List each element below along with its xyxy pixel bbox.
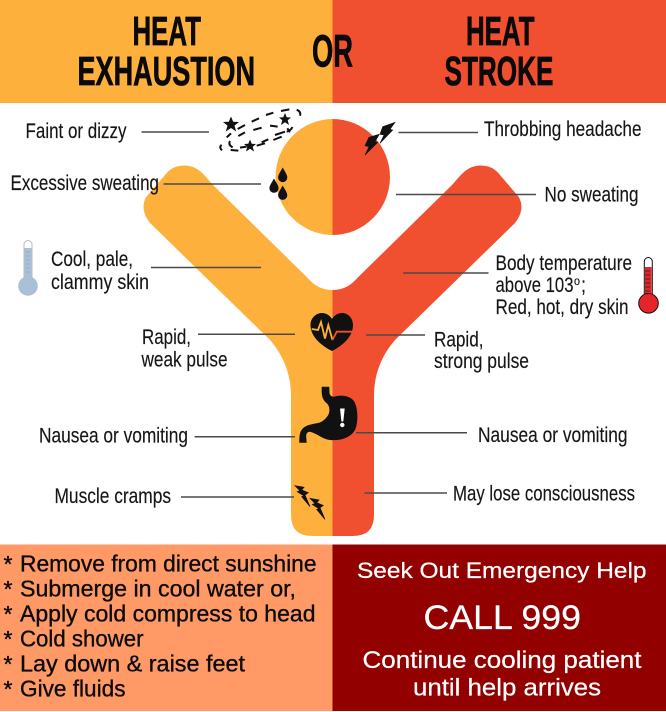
left symptoms labels bbox=[10, 120, 295, 508]
text: call 999: CALL 999 bbox=[424, 599, 581, 637]
heading: or: OR bbox=[312, 26, 353, 76]
list: first aid instructions: Apply cold compress to head bbox=[20, 600, 316, 626]
list: first aid instructions bbox=[4, 550, 316, 702]
list: first aid instructions: * bbox=[4, 551, 12, 577]
icon: cool thermometer bbox=[18, 240, 38, 296]
head right half bbox=[332, 119, 390, 235]
heading: heat stroke: STROKE bbox=[444, 48, 554, 94]
label: nausea or vomiting left: Nausea or vomiting bbox=[39, 424, 188, 448]
label: cool pale clammy skin: clammy skin bbox=[51, 271, 149, 294]
text: continue cooling patient bbox=[362, 647, 642, 702]
heading: heat exhaustion: HEAT bbox=[132, 8, 201, 54]
label: muscle cramps: Muscle cramps bbox=[54, 485, 171, 508]
text: seek out emergency help: Seek Out Emergency Help bbox=[357, 558, 646, 583]
panel: emergency help bbox=[332, 544, 666, 711]
text: continue cooling patient: Continue cooling patient bbox=[362, 647, 642, 674]
icon: headache lightning bbox=[365, 122, 395, 155]
label: rapid weak pulse: weak pulse bbox=[141, 348, 228, 372]
label: cool pale clammy skin: Cool, pale, bbox=[51, 248, 133, 271]
list: first aid instructions: Give fluids bbox=[20, 676, 126, 702]
icon: sweat drops bbox=[269, 168, 287, 200]
label: rapid weak pulse bbox=[141, 326, 295, 372]
torso left half bbox=[144, 166, 333, 536]
list: first aid instructions: * bbox=[4, 676, 12, 702]
text: continue cooling patient: until help arrives bbox=[413, 674, 601, 702]
list: first aid instructions: Remove from direct sunshine bbox=[20, 550, 316, 576]
list: first aid instructions: * bbox=[4, 601, 12, 627]
panel: first aid steps bbox=[0, 544, 333, 711]
label: body temperature: Body temperature bbox=[496, 252, 632, 275]
label: body temperature: above 103 bbox=[496, 274, 574, 297]
label: rapid weak pulse: Rapid, bbox=[142, 326, 191, 349]
label: body temperature bbox=[403, 252, 632, 319]
label: faint or dizzy: Faint or dizzy bbox=[26, 120, 127, 143]
label: rapid strong pulse: strong pulse bbox=[434, 350, 529, 373]
label: nausea or vomiting right: Nausea or vomiting bbox=[478, 424, 628, 447]
torso right half bbox=[332, 166, 521, 536]
heading: heat exhaustion bbox=[78, 8, 255, 94]
label: rapid strong pulse bbox=[366, 328, 529, 373]
list: first aid instructions: * bbox=[4, 626, 12, 652]
heading: heat stroke: HEAT bbox=[466, 8, 534, 54]
header band bbox=[0, 0, 666, 103]
label: no sweating: No sweating bbox=[544, 184, 638, 206]
list: first aid instructions: Cold shower bbox=[20, 626, 144, 652]
label: cool pale clammy skin bbox=[51, 248, 261, 294]
label: body temperature: ; bbox=[581, 274, 586, 297]
icon: hot thermometer bbox=[639, 258, 658, 313]
label: rapid strong pulse: Rapid, bbox=[434, 328, 484, 352]
right symptoms labels bbox=[356, 118, 642, 506]
heading: heat exhaustion: EXHAUSTION bbox=[78, 48, 255, 94]
label: body temperature: Red, hot, dry skin bbox=[496, 296, 628, 319]
list: first aid instructions: * bbox=[4, 651, 12, 677]
icon: dizzy stars bbox=[220, 109, 300, 152]
heading: heat stroke bbox=[444, 8, 554, 94]
body figure: Y-shaped torso and head bbox=[144, 119, 521, 536]
list: first aid instructions: Lay down & raise feet bbox=[20, 650, 246, 676]
label: excessive sweating: Excessive sweating bbox=[10, 172, 159, 195]
icon: heart with pulse bbox=[310, 313, 353, 351]
list: first aid instructions: * bbox=[4, 576, 12, 602]
head left half bbox=[276, 119, 333, 235]
label: body temperature: o bbox=[574, 274, 580, 288]
icon: muscle cramp bolts bbox=[295, 486, 325, 519]
list: first aid instructions: Submerge in cool water or, bbox=[20, 576, 296, 602]
icon: stomach bbox=[299, 387, 357, 443]
